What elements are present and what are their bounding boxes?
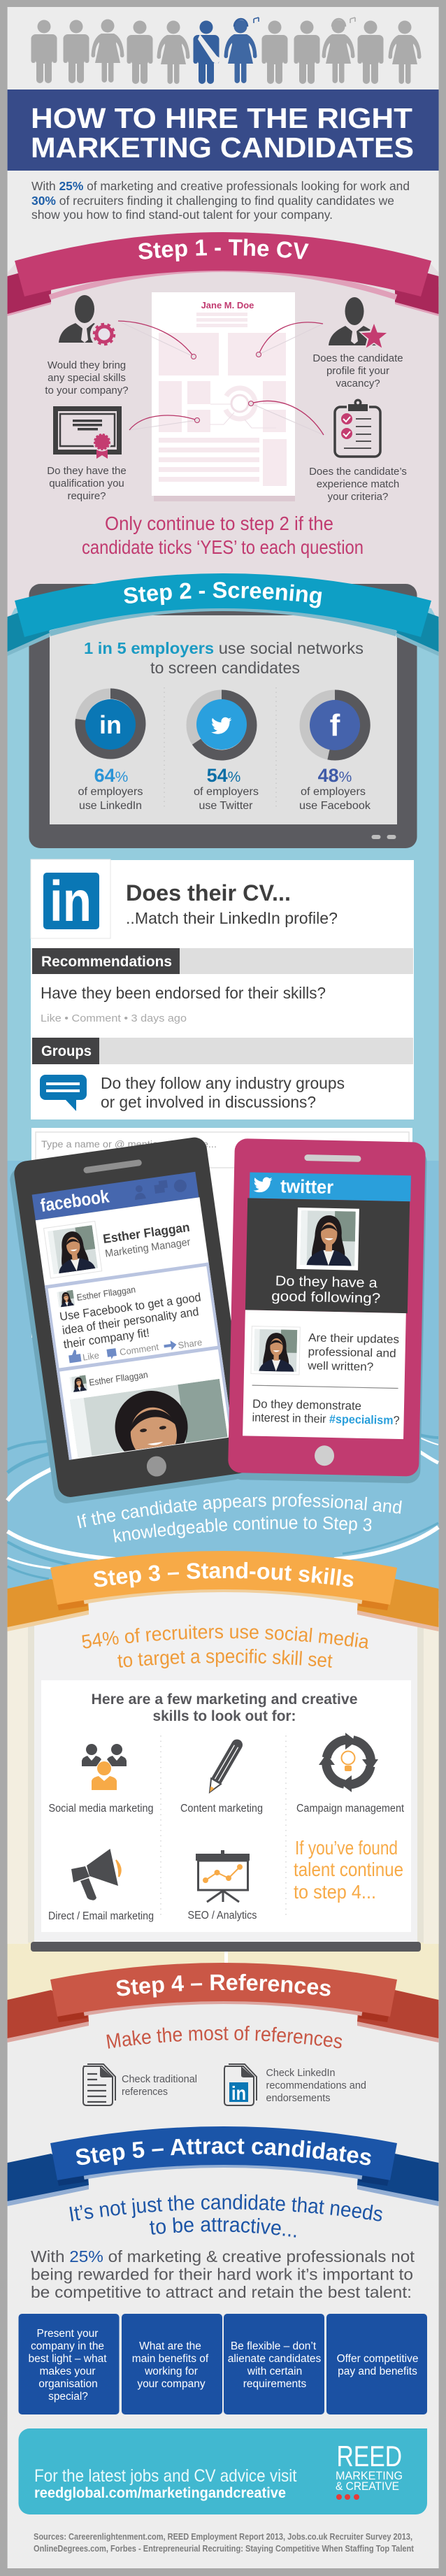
tip box 3 [224,2314,324,2414]
handwritten note: step 5: to be attractive... [150,2217,296,2238]
label: social media marketing: Social media marketing [49,1803,154,1815]
tip box 4: pay and benefits [338,2366,417,2377]
skills heading: Here are a few marketing and creative [91,1691,357,1708]
tip box 2: your company [137,2378,206,2390]
question: qualification: require? [67,490,106,502]
step 5 paragraph: be competitive to attract and retain the best talent: [31,2283,412,2301]
twitter profile [245,1198,410,1313]
step 4 and 5 section background [8,2000,439,2568]
question: qualification: qualification you [49,478,124,489]
question: experience [309,466,407,503]
CV content blocks [159,313,287,486]
tip box 1: best light – what [28,2353,107,2365]
post meta: Like • Comment • 3 days ago [41,1013,187,1024]
facebook post: text: Use Facebook to get a good [59,1290,202,1324]
facebook post: text: idea of their personality and [62,1305,199,1337]
tip box 3: with certain [247,2366,302,2377]
handwritten note: step 2: If the candidate appears professional and [77,1494,402,1529]
stat: 54 percent [194,765,259,812]
facebook profile [36,1197,233,1460]
skill dividers [161,1736,286,1918]
facebook actions [68,1332,203,1366]
tip box 1: special? [48,2391,88,2403]
recommendations bar: Recommendations [41,954,172,970]
step 4 ribbon [7,1963,439,2042]
facebook actions: Like [82,1350,100,1363]
icon: grey headphones and note [332,17,355,27]
question: qualification [47,465,127,502]
stat: 48 percent: 48% [318,765,352,786]
step 4 heading: Step 4 – References [116,1973,331,1998]
step 5 paragraph: With 25% of marketing & creative professionals not [31,2247,415,2266]
twitter profile: Do they have a [275,1273,378,1291]
facebook header [32,1172,199,1220]
intro text: show you how to find stand-out talent for your company. [31,208,333,222]
card heading: Does their CV... [126,880,291,906]
intro text: 30% of recruiters finding it challenging to find quality candidates we [31,194,394,208]
stat: 54 percent: 54% [207,765,240,786]
stat: 54 percent: of employers [194,786,259,798]
facebook actions: Share [178,1337,203,1351]
reference text: traditional: references [122,2087,168,2098]
stat: 64 percent: of employers [78,786,143,798]
icon: pencil [205,1738,245,1795]
icon: clipboard checklist [335,399,380,457]
phone shadows [8,1142,427,1505]
tip box 2: What are the [139,2340,201,2352]
reference text: LinkedIn: recommendations and [266,2080,366,2091]
call to action link: reedglobal.com/marketingandcreative [34,2485,286,2501]
tip box 4 [326,2314,427,2414]
phone: twitter [228,1138,426,1477]
icon: presentation board with chart [196,1850,250,1902]
tip box 2: working for [144,2366,198,2377]
title text [31,102,414,164]
call to action text: For the latest jobs and CV advice visit [34,2466,297,2486]
twitter questions: interest in their #specialism? [252,1411,400,1427]
stat: 48 percent: of employers [301,786,366,798]
facebook post: text: Esther Fllaggan [76,1284,136,1303]
intro text: With 25% of marketing and creative professionals looking for work and [31,179,410,193]
step 5 ribbon [7,2126,439,2206]
LinkedIn card [31,859,414,1119]
stat: 54 percent: use Twitter [199,800,253,812]
handwritten stat: 54 percent of recruiters: 54% of recruiters use social media [82,1625,368,1649]
handwritten note: step 3: to step 4... [294,1881,376,1903]
handwritten note: step 1: Only continue to step 2 if the [105,513,333,534]
tip box 2 [122,2314,222,2414]
icon: blue figure satchel [198,34,221,64]
tip box 1: Present your [37,2328,98,2340]
facebook post: text: their company fit! [63,1326,150,1351]
handwritten note: step 4: Make the most of references [106,2026,343,2049]
facebook post: photo: Esther Fllaggan [88,1369,149,1388]
tip box 4: Offer competitive [337,2353,418,2365]
logo: REED Marketing and Creative: & CREATIVE [336,2480,399,2493]
step 5 paragraph [31,2247,415,2301]
step 3 heading: Step 3 – Stand-out skills [94,1562,354,1587]
icon: social media people [82,1744,127,1790]
stat: 64 percent [78,765,143,812]
handwritten note: step 5 [69,2194,382,2238]
stat: 64 percent: use LinkedIn [79,800,142,812]
donut: Facebook 48% [305,695,365,755]
handwritten note: step 5: It’s not just the candidate that needs [69,2194,382,2221]
twitter questions: Are their updates [308,1331,399,1346]
tablet frame [29,584,417,848]
CV document [152,292,295,501]
groups bar [32,1038,413,1064]
icon: traditional reference document [83,2064,115,2105]
twitter questions: professional and [308,1345,396,1360]
icon: LinkedIn logo: in [50,870,92,933]
facebook profile: Esther Flaggan [102,1220,191,1246]
comment box panel [31,1128,412,1338]
logo: REED Marketing and Creative: REED [337,2440,402,2473]
label: content marketing: Content marketing [180,1803,263,1815]
icon: megaphone [71,1849,121,1901]
twitter header [250,1172,411,1201]
screening headline: to screen candidates [150,659,300,677]
question: experience: Does the candidate’s [309,466,407,478]
brush strokes [8,1435,438,1579]
comment box panel: Type a name or @ mention someone... [41,1138,217,1150]
groups bar: Groups [41,1043,92,1059]
question: special skills: Would they bring [48,359,126,371]
intro text [31,179,410,222]
stat: 48 percent: use Facebook [299,800,371,812]
handwritten note: step 3: talent continue [294,1859,403,1880]
step 3 ribbon [7,1551,439,1631]
sources [34,2531,415,2554]
twitter profile: good following? [271,1289,380,1306]
label: direct email marketing: Direct / Email marketing [48,1910,154,1922]
step 3 panel [8,1586,439,1966]
reference text: traditional [122,2074,197,2098]
facebook profile: Marketing Manager [104,1236,191,1260]
handwritten note: step 1: candidate ticks ‘YES’ to each question [82,536,364,558]
step 5 heading: Step 5 – Attract candidates [75,2138,371,2165]
label: campaign management: Campaign management [296,1803,405,1815]
twitter questions [243,1310,406,1439]
handwritten note: step 3: If you’ve found [295,1837,398,1859]
social phones section background [8,1161,439,1608]
question: special skills: any special skills [48,372,126,384]
handwritten stat: 54 percent of recruiters: to target a specific skill set [117,1649,333,1668]
question: special skills: to your company? [45,385,129,396]
groups question: or get involved in discussions? [101,1093,316,1111]
groups question: Do they follow any industry groups [101,1074,345,1092]
icon: certificate [56,408,119,459]
question: profile fit: vacancy? [336,378,380,389]
logo: REED Marketing and Creative: MARKETING [336,2469,403,2482]
question: profile fit: Does the candidate [312,352,403,364]
screening headline: 1 in 5 employers use social networks [84,639,364,657]
tip box 3: alienate candidates [228,2353,322,2365]
icon: Facebook f: f [330,708,340,743]
handwritten note: step 2: knowledgeable continue to Step 3 [113,1516,372,1543]
handwritten note: step 3 [294,1837,403,1903]
reference text: LinkedIn: Check LinkedIn [266,2068,336,2079]
icon: Twitter bird [211,717,231,734]
step 1 heading: Step 1 - The CV [138,238,309,262]
question: experience: experience match [317,478,399,490]
twitter questions: well written? [307,1359,373,1373]
tip box 1: company in the [31,2340,104,2352]
tip box 1: makes your [39,2366,96,2377]
twitter questions: Do they demonstrate [252,1397,361,1412]
icon: person with gear [59,295,118,348]
step 2 ribbon [7,573,439,656]
reference text: LinkedIn: endorsements [266,2093,330,2104]
facebook actions: Comment [119,1341,159,1357]
step 2 heading: Step 2 - Screening [124,582,322,608]
groups question [101,1074,345,1111]
twitter header: twitter [280,1175,334,1198]
skills heading [91,1691,357,1724]
icon: campaign cycle with bulb [319,1733,378,1792]
question: special skills [45,359,129,396]
skills heading: skills to look out for: [152,1708,296,1724]
title text: HOW TO HIRE THE RIGHT [31,102,412,134]
facebook header: facebook [39,1185,110,1216]
reference text: LinkedIn [266,2068,366,2104]
donut: LinkedIn 64% [80,694,141,754]
icon: LinkedIn reference document: in [231,2082,246,2104]
facebook post: text [45,1262,233,1460]
CV name: Jane M. Doe [201,300,254,310]
dotted dividers [164,687,276,810]
icon: LinkedIn reference document [224,2064,257,2105]
question: profile fit [312,352,403,389]
icon: blue headphones and note [234,17,259,27]
handwritten stat: 54 percent of recruiters [82,1625,368,1668]
step 1 ribbon [7,232,439,316]
call to action panel [18,2428,427,2514]
connector curves [118,321,324,435]
reference text: traditional: Check traditional [122,2074,197,2085]
question: profile fit: profile fit your [326,365,389,377]
stat: 64 percent: 64% [94,765,128,786]
logo: REED Marketing and Creative [336,2440,403,2500]
top section background [8,7,439,287]
step 1 section background [8,237,439,629]
recommendations question: Have they been endorsed for their skills? [41,984,326,1002]
row of people figures [31,17,422,84]
screening headline [84,639,364,677]
question: qualification: Do they have the [47,465,127,477]
phone: facebook [13,1136,252,1498]
icon: chat bubble [40,1075,87,1111]
question: experience: your criteria? [328,491,388,503]
card subheading: ..Match their LinkedIn profile? [126,909,338,927]
recommendations bar [32,948,413,974]
step 5 paragraph: being rewarded for their hard work it’s important to [31,2266,413,2284]
icon: LinkedIn: in [99,710,122,739]
step 2 section background [8,584,439,1161]
CV gauge [210,388,283,428]
tip box 1: organisation [38,2378,98,2390]
tip box 3: requirements [243,2378,306,2390]
facebook post: photo [70,1373,228,1458]
handwritten note: step 1 [82,513,364,558]
tip box 1 [18,2314,119,2414]
tip box 2: main benefits of [132,2353,209,2365]
tip box 3: Be flexible – don’t [231,2340,317,2352]
stat: 48 percent [299,765,371,812]
donut: Twitter 54% [192,695,252,755]
title text: MARKETING CANDIDATES [31,131,414,164]
step 3 cream background [8,1601,439,2007]
title banner [8,90,439,171]
label: SEO analytics: SEO / Analytics [187,1910,257,1922]
icon: person with star [329,297,389,350]
